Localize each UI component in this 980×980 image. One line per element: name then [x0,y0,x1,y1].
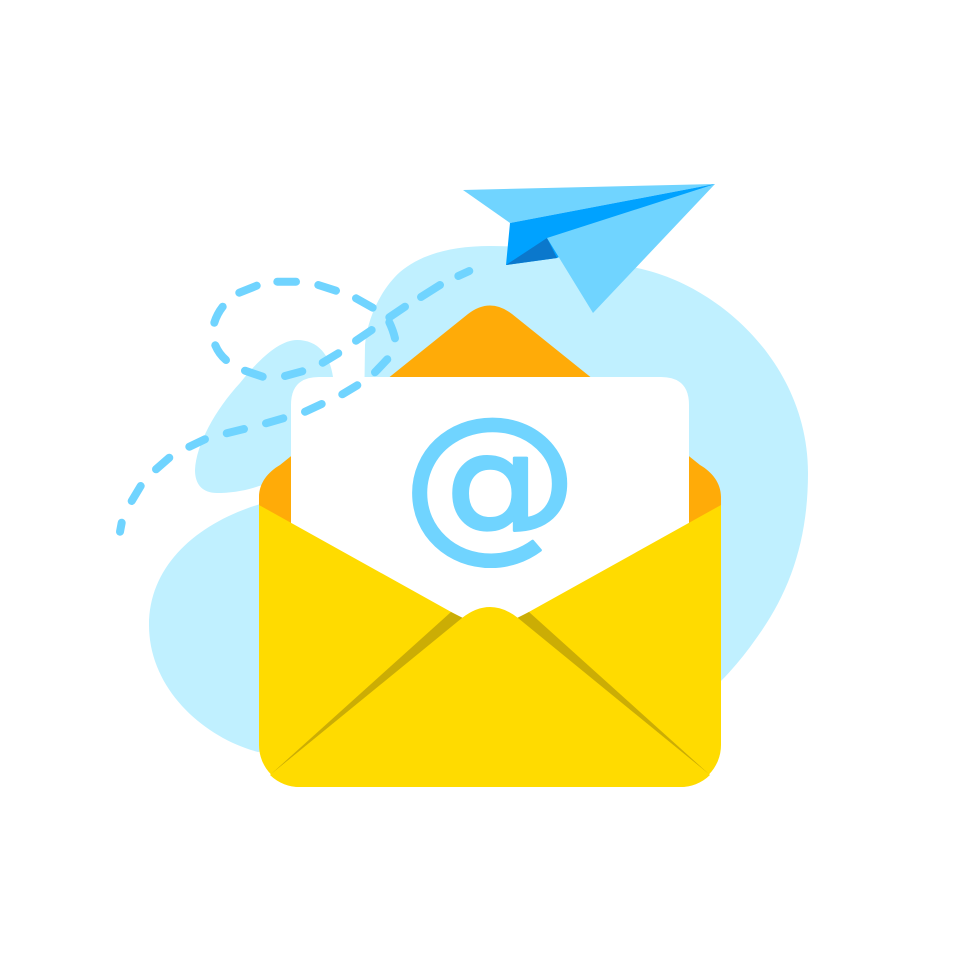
at symbol: @ [402,381,578,577]
letter sheet [291,377,689,640]
envelope side panels [259,505,721,787]
envelope fold shadow right [517,612,710,775]
dashed flight path [120,271,469,532]
envelope front [259,505,721,787]
plane dark fold [506,238,557,265]
background blob large [149,246,808,752]
paper plane [463,184,715,313]
envelope back flap [259,306,721,560]
plane left wing [463,184,715,223]
plane fold [506,184,715,265]
envelope fold shadow left [270,612,463,775]
envelope front flap [270,607,710,787]
plane right wing [547,184,715,313]
background blob small [195,340,340,493]
